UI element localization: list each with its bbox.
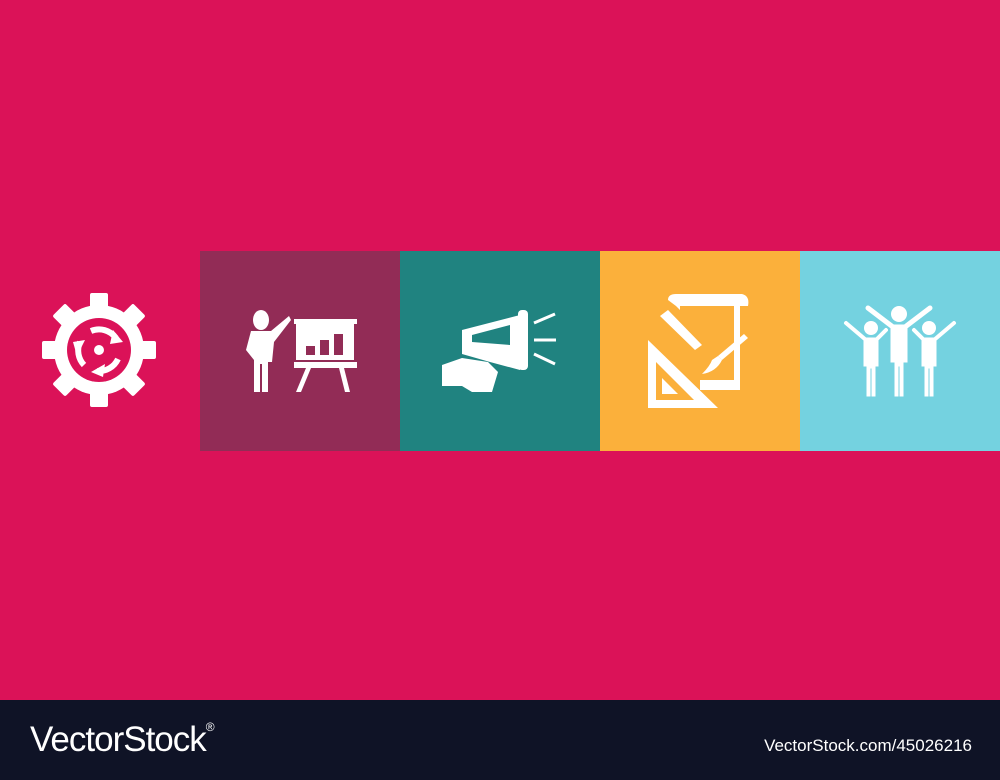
footer bar [0, 700, 1000, 780]
panel: presentation [200, 251, 400, 451]
icon: three people cheering [846, 306, 954, 396]
icon: paper pencil brush ruler [648, 294, 748, 408]
icon: hand with megaphone [442, 310, 556, 392]
footer logo: VectorStock® [30, 720, 214, 759]
panel: design tools [600, 251, 800, 451]
panel: megaphone [400, 251, 600, 451]
icon: presenter with board [246, 310, 357, 392]
footer image id: VectorStock.com/45026216 [764, 736, 972, 755]
panel: team [800, 251, 1000, 451]
icon: gear with cycle arrows [42, 293, 156, 407]
